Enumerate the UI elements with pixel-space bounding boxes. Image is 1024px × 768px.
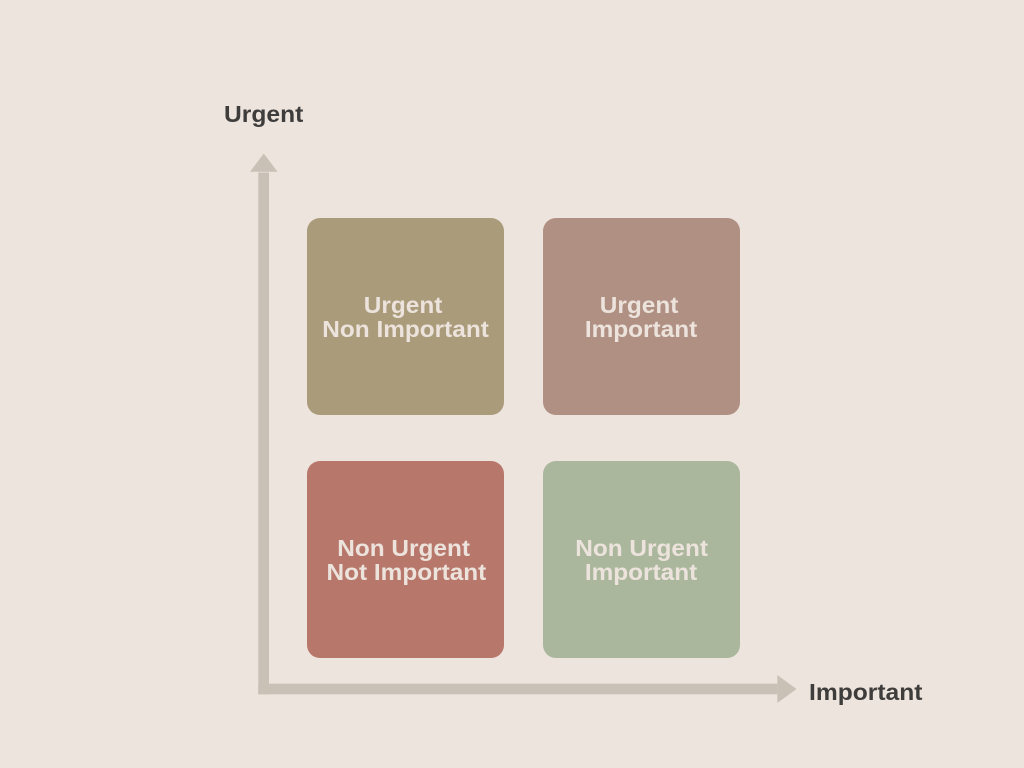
panel: urgent important (543, 218, 740, 415)
panel: non urgent not important: Non Urgent (337, 535, 470, 561)
panel: urgent non important: Non Important (323, 316, 489, 342)
axis label: Urgent: Urgent (224, 101, 303, 127)
panel: urgent non important (307, 218, 504, 415)
panel: non urgent important (543, 461, 740, 658)
panel: non urgent important: Important (585, 559, 697, 585)
arrow: vertical urgent axis (250, 154, 278, 694)
panel: non urgent important: Non Urgent (575, 535, 708, 561)
panel: urgent important: Urgent (600, 292, 678, 318)
arrow: horizontal important axis (258, 675, 796, 703)
panel: urgent non important: Urgent (364, 292, 443, 318)
panel: non urgent not important: Not Important (326, 559, 486, 585)
axis label: Important: Important (809, 679, 922, 705)
panel: urgent important: Important (585, 316, 697, 342)
panel: non urgent not important (307, 461, 504, 658)
